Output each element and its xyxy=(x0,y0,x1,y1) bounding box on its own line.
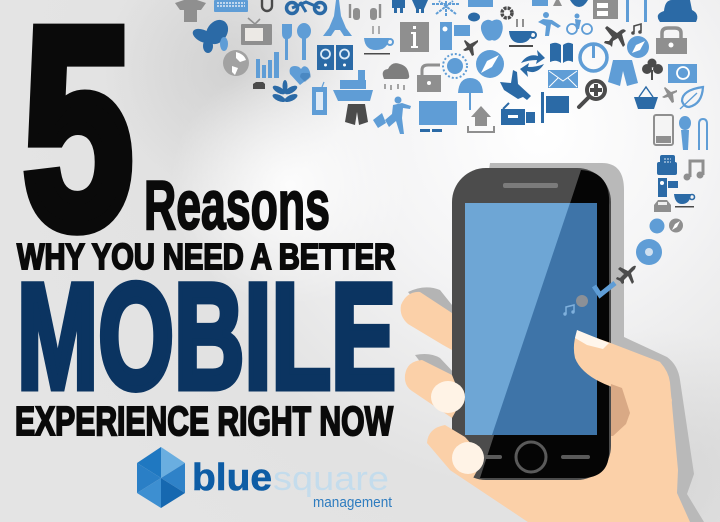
icon: running man xyxy=(373,96,411,134)
ring finger and lower palm xyxy=(427,425,600,522)
icon: television xyxy=(241,18,272,45)
screen dark gloss xyxy=(492,203,597,435)
icon: monitor xyxy=(419,101,457,132)
icon: dark shorts xyxy=(345,104,368,125)
title: 5 Reasons why you need a better mobile experience right now xyxy=(15,0,396,444)
icon: airplane gray xyxy=(662,87,677,103)
icon: open book xyxy=(550,43,573,63)
index finger xyxy=(401,292,452,350)
icon: ship xyxy=(333,70,373,101)
icon: small note on screen xyxy=(563,305,575,316)
icon: plant xyxy=(271,80,299,104)
icon: dark coffee cup xyxy=(509,19,536,47)
icon: airplane near phone xyxy=(616,266,636,284)
icon: compass large xyxy=(476,50,504,78)
ring finger nail xyxy=(452,442,484,474)
icon: bar chart xyxy=(256,52,279,78)
icon: sofa xyxy=(657,155,677,175)
finger shadows xyxy=(408,287,456,390)
icon: juice box xyxy=(312,82,327,115)
icon: umbrella xyxy=(458,78,483,110)
icon: hexagon cube xyxy=(137,447,185,508)
icon: airplane dark xyxy=(604,26,626,47)
icon: padlock xyxy=(656,28,687,54)
icon: clover xyxy=(642,58,663,80)
icon: fork and spoon xyxy=(282,23,311,60)
heading: experience right now: EXPERIENCE RIGHT NOW xyxy=(15,398,393,444)
heading: Reasons: Reasons xyxy=(144,166,330,244)
middle finger xyxy=(405,360,462,418)
icon: small tower xyxy=(553,0,562,6)
icon: butterfly xyxy=(190,16,233,53)
icon: apple xyxy=(481,20,503,41)
icon: flag xyxy=(541,92,569,123)
icon: thumbs up xyxy=(500,70,531,100)
icon: compass xyxy=(627,36,649,58)
icon: t-shirt xyxy=(175,0,206,22)
icon: small apple xyxy=(650,218,664,234)
thumb nail xyxy=(575,330,609,349)
hand and phone shadow xyxy=(470,163,704,522)
icon: photo camera xyxy=(668,64,697,83)
icon: bicycle xyxy=(286,2,326,14)
icon: light paperclip xyxy=(699,119,707,150)
palm behind phone xyxy=(450,340,690,522)
middle finger nail xyxy=(431,381,465,413)
logo word: blue: blue xyxy=(192,457,272,499)
right soft key xyxy=(561,455,590,459)
icon: globe xyxy=(223,50,249,76)
icon: hearts xyxy=(290,66,311,85)
icon: coffee cup xyxy=(364,26,393,54)
icon: small compass xyxy=(669,218,683,232)
logo word: management: management xyxy=(313,494,393,511)
gray dot on screen xyxy=(576,295,588,307)
icon: lock xyxy=(417,65,441,92)
icon: recycling arrows xyxy=(520,50,545,77)
icon: people xyxy=(392,0,428,13)
icon: cyclist xyxy=(567,14,592,34)
icon: snowflake xyxy=(432,1,460,16)
icon: keyboard xyxy=(214,0,248,12)
icon: airplane small xyxy=(463,40,478,56)
heading: why you need a better: WHY YOU NEED A BETTER xyxy=(17,236,395,277)
icon: circle fragment xyxy=(570,0,588,7)
icon: small banner xyxy=(468,0,493,7)
home button xyxy=(516,442,546,472)
icon: check mark xyxy=(594,283,615,295)
icon: small camcorder xyxy=(658,178,678,197)
icon: microphone xyxy=(679,116,691,150)
icon: runner small xyxy=(538,12,561,36)
screen xyxy=(465,203,597,435)
phone body xyxy=(452,168,611,480)
icon: camcorder light xyxy=(440,22,470,50)
illustration: hand holding smartphone xyxy=(401,163,704,522)
icon: music note xyxy=(631,24,642,35)
icon: info sign xyxy=(400,22,429,52)
icon: sun xyxy=(443,54,467,78)
speaker slot xyxy=(503,183,558,188)
logo: bluesquare management xyxy=(137,447,393,511)
smartphone xyxy=(452,168,611,480)
heading: mobile: MOBILE xyxy=(17,252,396,420)
icon: small coffee cup xyxy=(674,194,694,208)
icon: small car xyxy=(654,200,671,212)
icon: light shorts xyxy=(608,60,638,86)
icon: smartphone outline xyxy=(654,115,673,145)
icon: headphones xyxy=(350,4,380,20)
icon: music note gray xyxy=(684,161,704,180)
icon: fork and spoon small xyxy=(626,0,647,22)
palm crease shading xyxy=(611,384,630,436)
icon: zoom magnifier xyxy=(579,81,605,107)
icon: calendar xyxy=(532,0,548,6)
icon: envelope xyxy=(548,70,578,88)
icon: eiffel tower xyxy=(323,0,352,36)
icon: rain cloud xyxy=(383,63,409,90)
icon: shopping basket xyxy=(634,87,658,109)
logo word: square: square xyxy=(273,460,389,498)
icon: home upload xyxy=(468,106,494,132)
icon: video camera xyxy=(501,103,535,125)
icon: power button xyxy=(580,44,607,71)
phone dark gloss xyxy=(480,170,609,478)
icon: car xyxy=(253,82,265,89)
icon: leaf xyxy=(680,87,703,109)
icon: speakers xyxy=(317,45,353,70)
icon: small blob xyxy=(468,12,480,22)
icon cloud: apps flowing from the phone xyxy=(175,0,707,265)
icon: disc xyxy=(636,239,662,265)
left soft key xyxy=(484,455,502,459)
icon: gear xyxy=(502,8,512,18)
thumb xyxy=(574,331,672,470)
icon: door panel xyxy=(593,0,618,19)
icon: dark cloud xyxy=(658,0,697,22)
icon: paperclip xyxy=(262,0,272,11)
